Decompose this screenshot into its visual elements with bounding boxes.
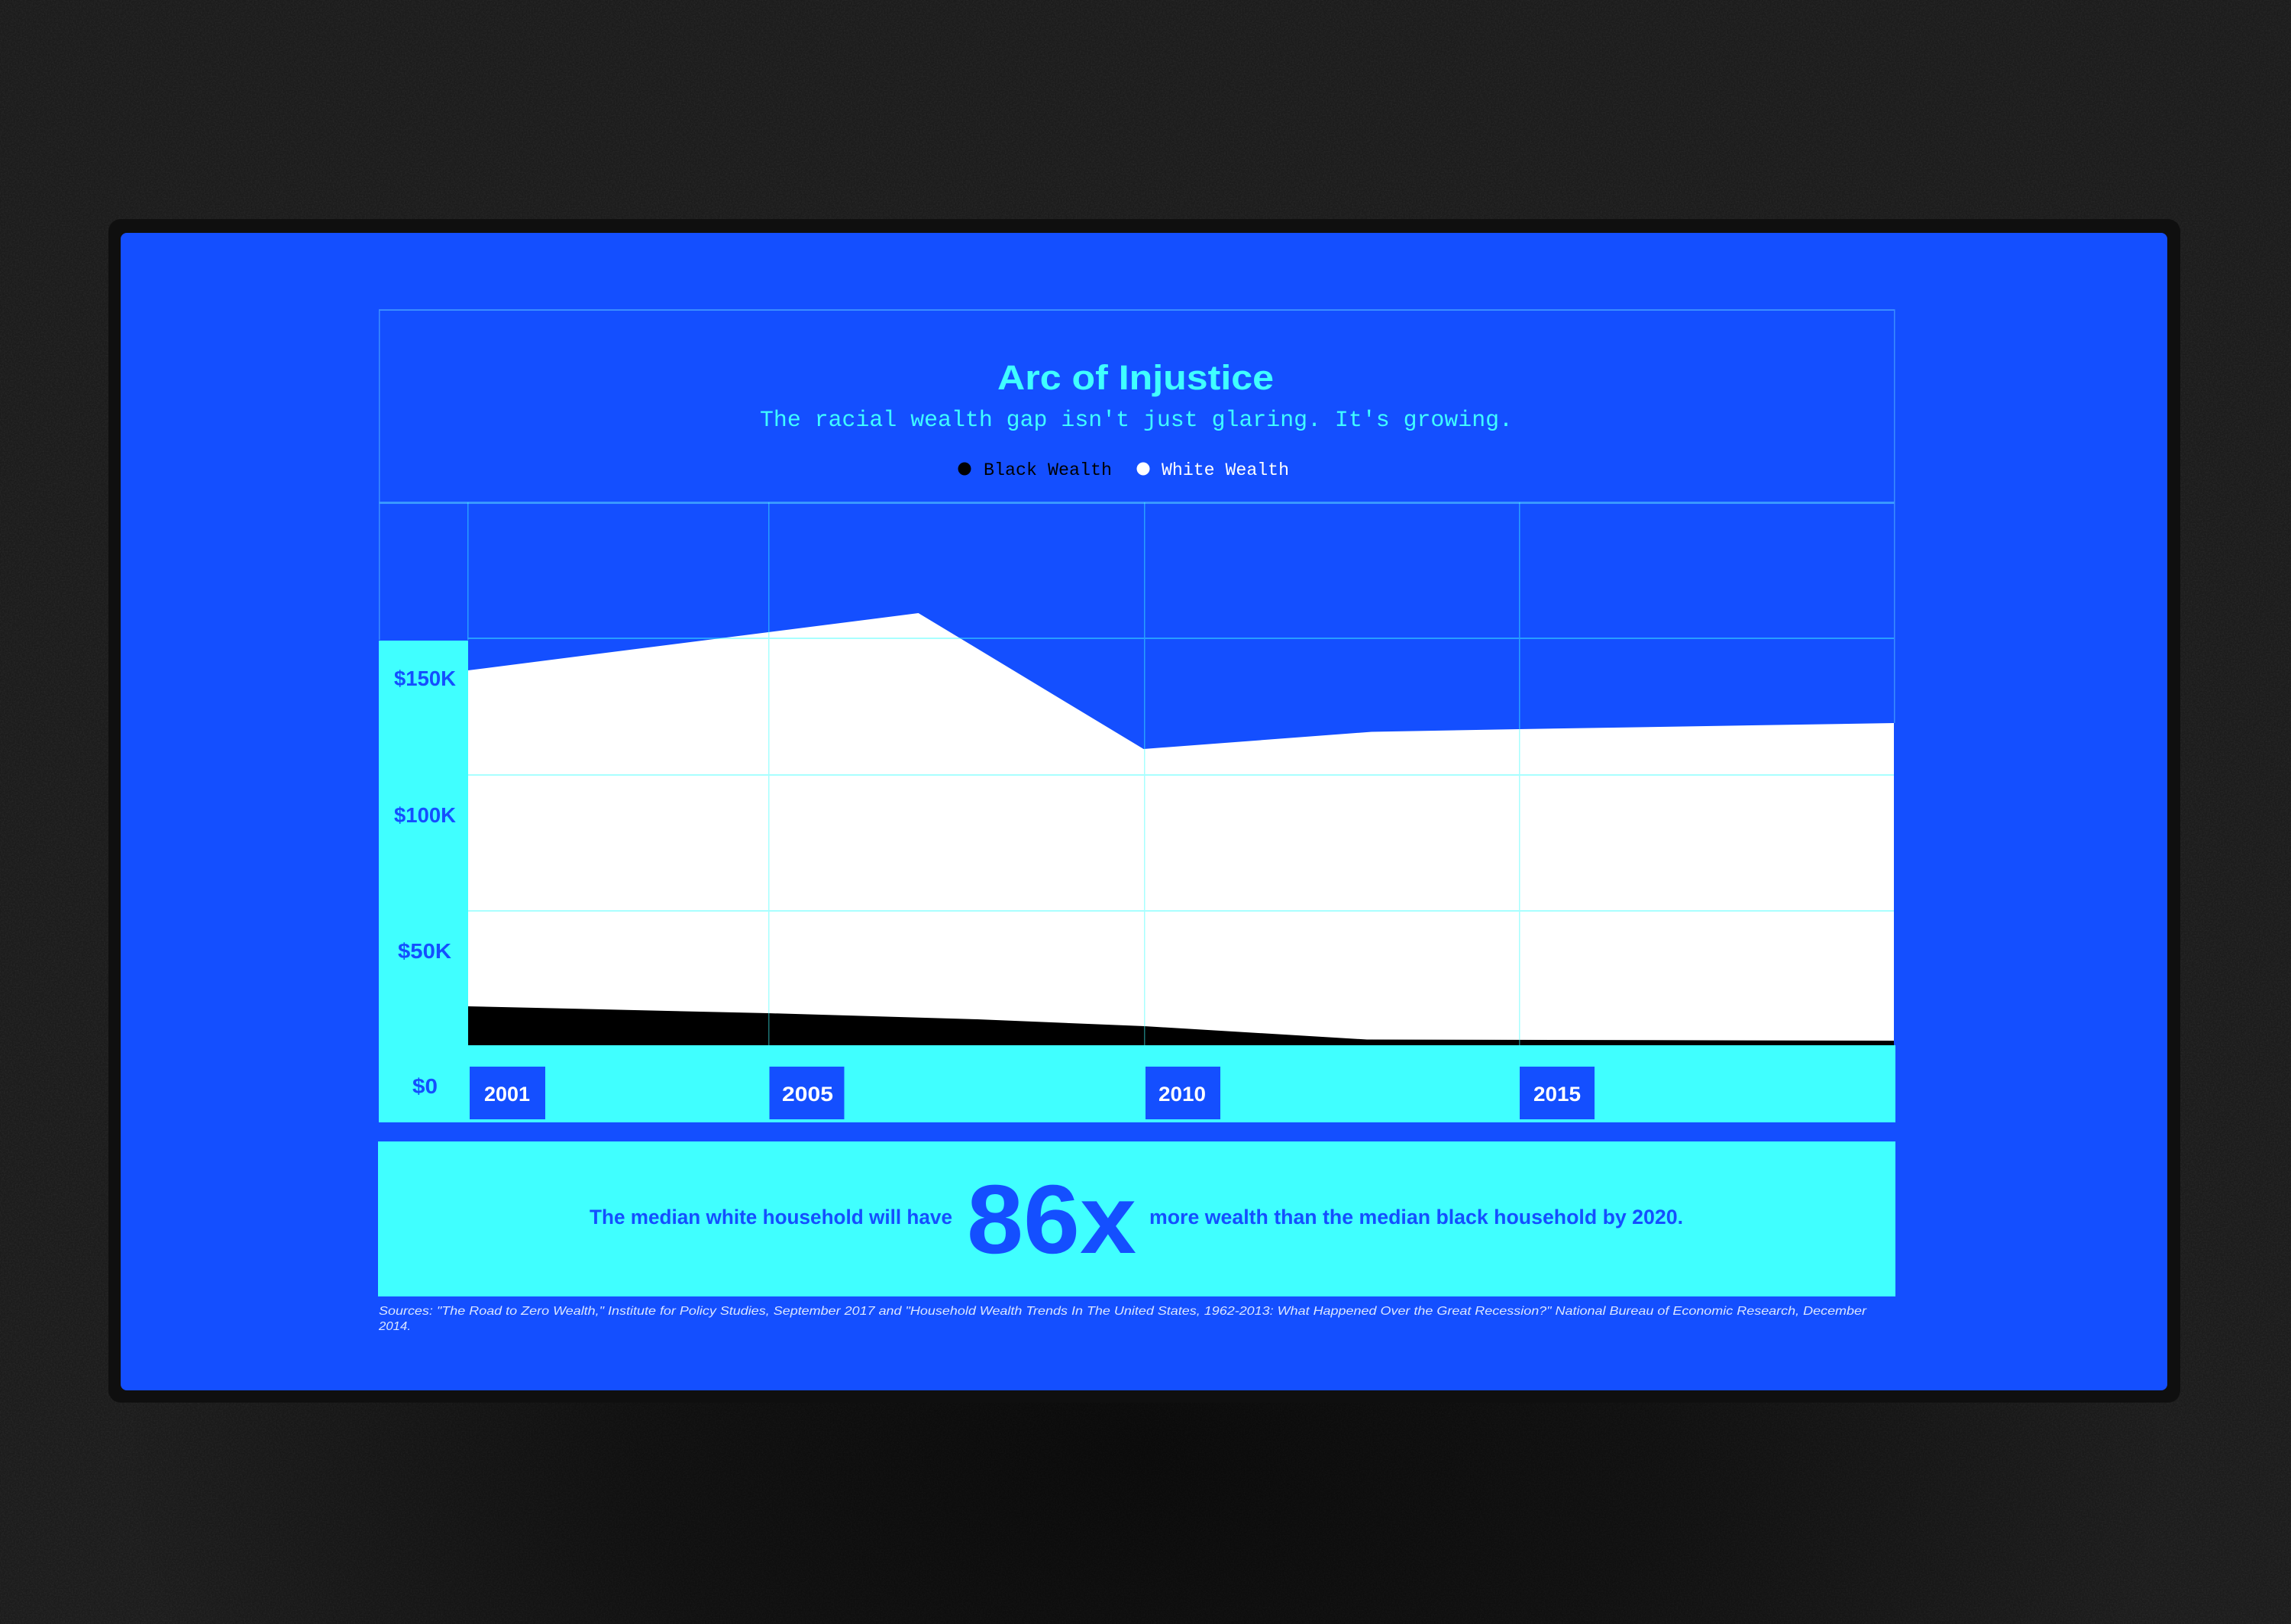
header panel <box>760 358 1513 480</box>
white wealth area <box>468 613 1894 1045</box>
year: 2010: 2010 <box>1158 1083 1206 1106</box>
big number: 86x: 86x <box>967 1165 1136 1274</box>
label: $100K: $100K <box>394 803 456 827</box>
year: 2005 <box>770 1067 845 1119</box>
screen bezel <box>108 219 2180 1403</box>
year labels <box>470 1067 1595 1119</box>
sources note <box>378 1305 1867 1333</box>
year: 2001: 2001 <box>484 1083 530 1106</box>
legend item: white wealth: White Wealth <box>1162 460 1289 480</box>
blue screen panel <box>121 233 2167 1390</box>
legend <box>958 460 1289 480</box>
callout text left: The median white household will have <box>590 1206 952 1228</box>
year: 2001 <box>470 1067 545 1119</box>
title: Arc of Injustice <box>997 358 1274 397</box>
sources note: Sources: "The Road to Zero Wealth," Institute for Policy Studies, September 2017 and "Household Wealth Trends In The United States, 1962-2013: What Happened Over the Great Recession?" National Bureau of Economic Research, December <box>379 1305 1867 1318</box>
callout text right: more wealth than the median black household by 2020. <box>1149 1206 1683 1228</box>
label: $0: $0 <box>412 1074 438 1098</box>
label: $150K: $150K <box>394 667 456 690</box>
year: 2015 <box>1520 1067 1595 1119</box>
year: 2005: 2005 <box>782 1083 833 1106</box>
black wealth area <box>468 1006 1894 1045</box>
y axis band <box>379 641 468 1122</box>
label: $50K: $50K <box>398 939 451 963</box>
year: 2010 <box>1146 1067 1220 1119</box>
legend item: black wealth: Black Wealth <box>984 460 1112 480</box>
area chart <box>379 309 1895 1122</box>
callout panel <box>378 1141 1895 1296</box>
subtitle: The racial wealth gap isn't just glaring. It's growing. <box>760 408 1513 434</box>
x axis band <box>468 1045 1895 1122</box>
chart grid <box>379 309 1895 1045</box>
sources note: 2014. <box>378 1320 411 1333</box>
year: 2015: 2015 <box>1533 1083 1581 1106</box>
y axis labels <box>394 667 456 1098</box>
